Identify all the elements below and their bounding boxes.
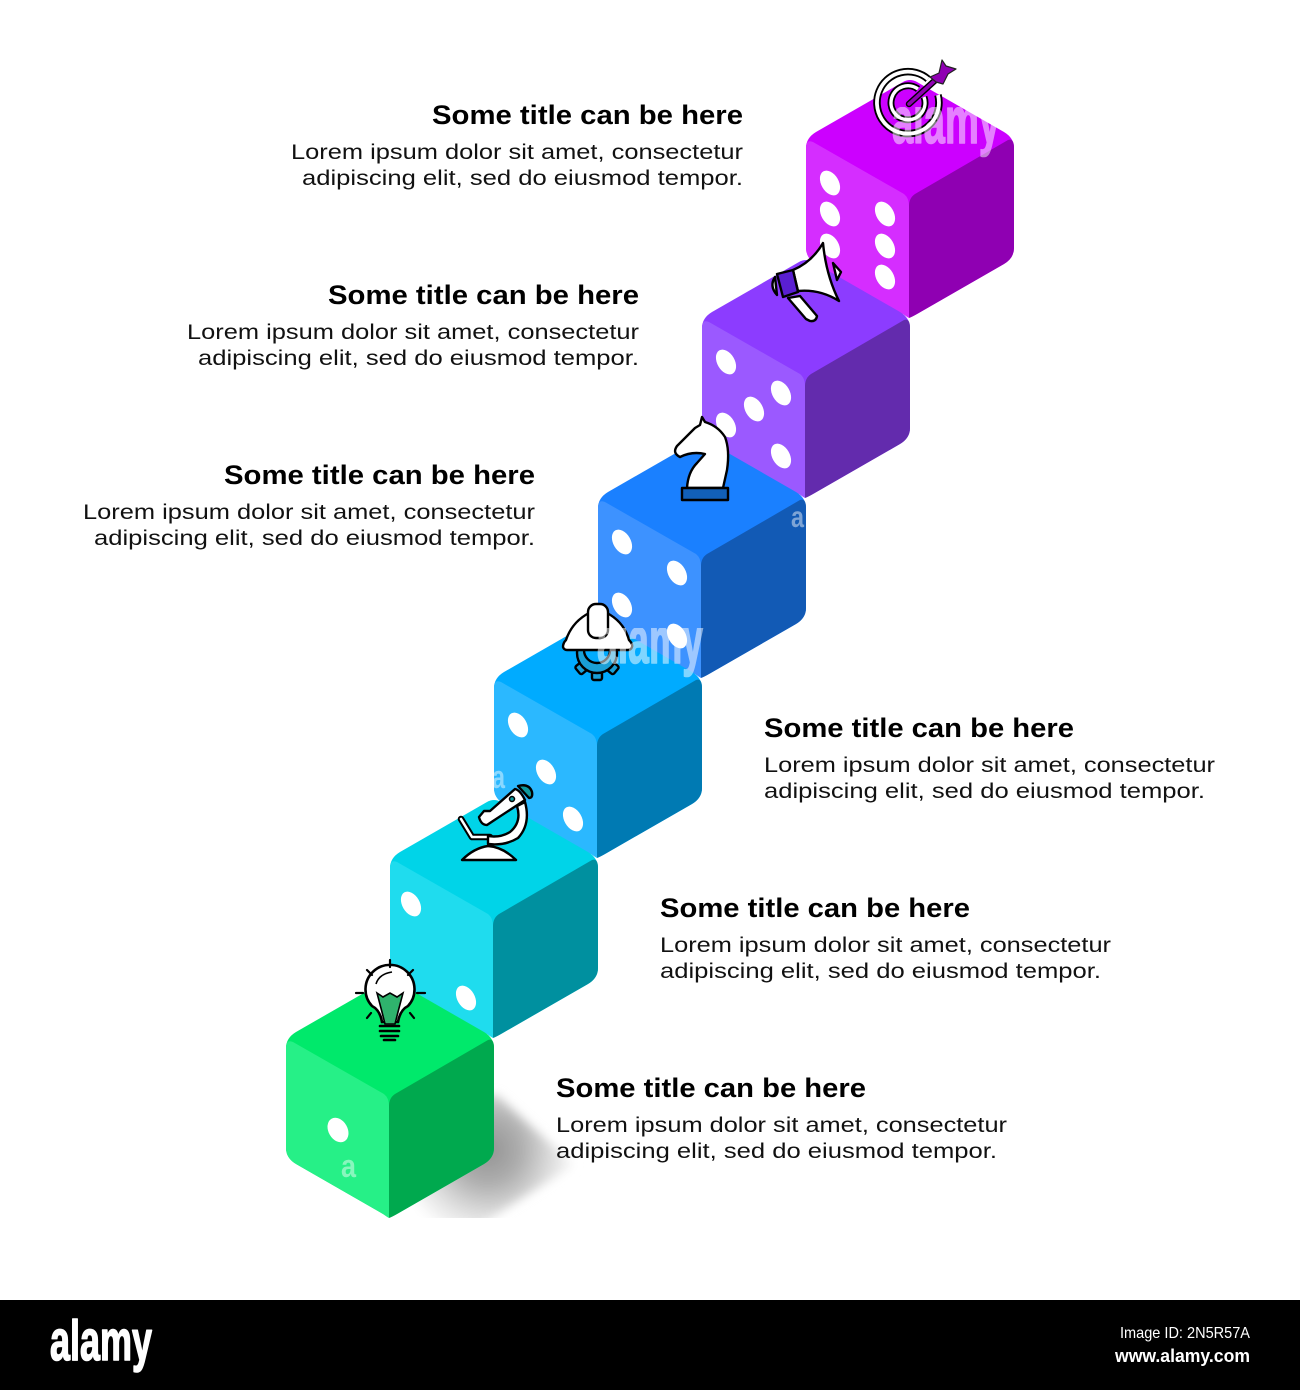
text block 2: Lorem ipsum dolor sit amet, consectetur	[660, 933, 1111, 957]
text block 4: adipiscing elit, sed do eiusmod tempor.	[94, 526, 535, 550]
text block 6: adipiscing elit, sed do eiusmod tempor.	[302, 166, 743, 190]
text block 4: Lorem ipsum dolor sit amet, consectetur	[83, 500, 535, 524]
text block 1: Some title can be here	[556, 1073, 866, 1103]
cube 3: sky blue die	[494, 620, 702, 858]
text block 1: adipiscing elit, sed do eiusmod tempor.	[556, 1139, 997, 1163]
text block 3	[764, 713, 1215, 803]
text block 3: Lorem ipsum dolor sit amet, consectetur	[764, 753, 1215, 777]
cube shadow	[420, 1091, 568, 1218]
text block 4	[83, 460, 535, 550]
text block 6	[291, 100, 743, 190]
icon: light bulb	[356, 960, 425, 1040]
text block 5	[187, 280, 639, 370]
text block 2: adipiscing elit, sed do eiusmod tempor.	[660, 959, 1101, 983]
text block 6: Some title can be here	[432, 100, 743, 130]
text block 2: Some title can be here	[660, 893, 970, 923]
watermark: letter a on sky die: a	[492, 759, 505, 795]
footer bar	[0, 1300, 1300, 1390]
icon: microscope	[461, 785, 532, 860]
cube 4: blue die	[598, 440, 806, 678]
icon: helmet and gear	[563, 604, 632, 680]
cube 2: cyan die	[390, 800, 598, 1038]
text block 4: Some title can be here	[224, 460, 535, 490]
text block 3: adipiscing elit, sed do eiusmod tempor.	[764, 779, 1205, 803]
text block 5: Lorem ipsum dolor sit amet, consectetur	[187, 320, 639, 344]
watermark: letter a on green die: a	[341, 1148, 356, 1184]
cube 5: purple die	[702, 260, 910, 498]
text block 1	[556, 1073, 1007, 1163]
footer bar: Image ID: 2N5R57A	[1120, 1325, 1250, 1342]
icon: target with arrow	[877, 60, 956, 134]
icon: megaphone	[772, 243, 841, 321]
footer bar: alamy	[50, 1309, 152, 1373]
icon: chess knight	[675, 417, 728, 500]
text block 5: adipiscing elit, sed do eiusmod tempor.	[198, 346, 639, 370]
cube 6: magenta die	[806, 80, 1014, 318]
text block 5: Some title can be here	[328, 280, 639, 310]
watermark: alamy on blue die: alamy	[597, 603, 703, 677]
text block 3: Some title can be here	[764, 713, 1074, 743]
watermark: alamy on magenta die: alamy	[892, 83, 1000, 157]
cube 1: green die	[286, 980, 494, 1218]
text block 2	[660, 893, 1111, 983]
watermark: letter a on blue die edge: a	[791, 501, 804, 534]
footer bar: www.alamy.com	[1114, 1346, 1250, 1366]
text block 6: Lorem ipsum dolor sit amet, consectetur	[291, 140, 743, 164]
text block 1: Lorem ipsum dolor sit amet, consectetur	[556, 1113, 1007, 1137]
